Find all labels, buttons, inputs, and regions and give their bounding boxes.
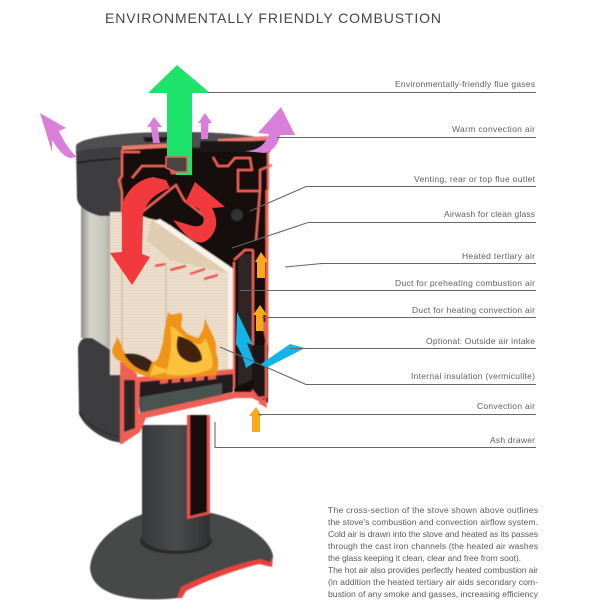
- large down arrow: [110, 177, 170, 285]
- blue outside air arrows: [236, 312, 305, 368]
- orange convection air arrows: [249, 252, 268, 432]
- pedestal: [142, 415, 210, 551]
- glass door: [81, 205, 111, 350]
- side wall line: [122, 212, 166, 352]
- right duct: [234, 250, 268, 403]
- label: airwash: Airwash for clean glass: [444, 209, 535, 219]
- upper interior: [122, 148, 268, 272]
- description paragraph: The cross-section of the stove shown above outlines: [328, 505, 538, 515]
- base plate: [90, 513, 273, 599]
- casting walls: [119, 140, 272, 388]
- description paragraph: the stove's combustion and convection airflow system.: [328, 517, 538, 527]
- description paragraph: bustion of any smoke and gasses, increasing efficiency: [328, 589, 539, 599]
- curled arrow: [173, 182, 225, 242]
- small centre-right arrow: [198, 113, 212, 139]
- description paragraph: The hot air also provides perfectly heated combustion air: [328, 565, 538, 575]
- label: insulation: Internal insulation (vermiculite): [411, 371, 535, 381]
- top plate cut: [122, 136, 268, 150]
- hood dark insert: [143, 137, 270, 152]
- title: ENVIRONMENTALLY FRIENDLY COMBUSTION: [105, 10, 441, 26]
- label: flue outlet: Venting, rear or top flue outlet: [414, 174, 536, 184]
- description paragraph: through the cast iron channels (the heated air washes: [328, 541, 538, 551]
- label: preheating duct: Duct for preheating combustion air: [395, 278, 535, 288]
- firebox side edge: [228, 272, 234, 372]
- upper arrow: [255, 252, 268, 278]
- label: convection duct: Duct for heating convection air: [412, 305, 535, 315]
- right arrow: [244, 107, 295, 153]
- label: convection air: Convection air: [477, 401, 535, 411]
- baffle edge: [154, 219, 235, 275]
- flames: [112, 312, 218, 379]
- red hot air arrows: [110, 177, 225, 285]
- callout labels: [395, 79, 536, 445]
- label: outside air: Optional: Outside air intake: [426, 336, 535, 346]
- label: warm convection air: Warm convection air: [452, 124, 535, 134]
- upper body band: [76, 132, 270, 216]
- leader lines: [208, 92, 536, 448]
- lower body band: [78, 337, 122, 443]
- firebox back wall: [110, 212, 234, 375]
- grey ledge over flue arrow: [166, 157, 187, 172]
- green flue gas arrow: [148, 65, 210, 175]
- label: ash drawer: Ash drawer: [490, 435, 535, 445]
- label: tertiary air: Heated tertiary air: [462, 251, 535, 261]
- left arrow: [40, 113, 77, 158]
- label: flue gases: Environmentally-friendly flue gases: [395, 79, 535, 89]
- warm convection air arrows: [40, 107, 295, 158]
- middle arrow: [253, 305, 267, 331]
- firebed and ash pan: [120, 322, 268, 444]
- flue damper disc: [231, 209, 243, 221]
- soot marks: [155, 264, 218, 279]
- inner arrow: [236, 312, 255, 368]
- description paragraph: Cold air is drawn into the stove and heated as its passes: [328, 529, 538, 539]
- small centre-left arrow: [147, 117, 162, 143]
- description paragraph: (in addition the heated tertiary air aids secondary com-: [328, 577, 538, 587]
- description paragraph: the glass keeping it clean, clear and free from soot).: [328, 553, 521, 563]
- intake arrow: [261, 344, 305, 368]
- description paragraph: [328, 505, 539, 599]
- lower arrow: [249, 407, 262, 432]
- stove cross-section: [76, 132, 273, 599]
- baffle: [147, 219, 235, 274]
